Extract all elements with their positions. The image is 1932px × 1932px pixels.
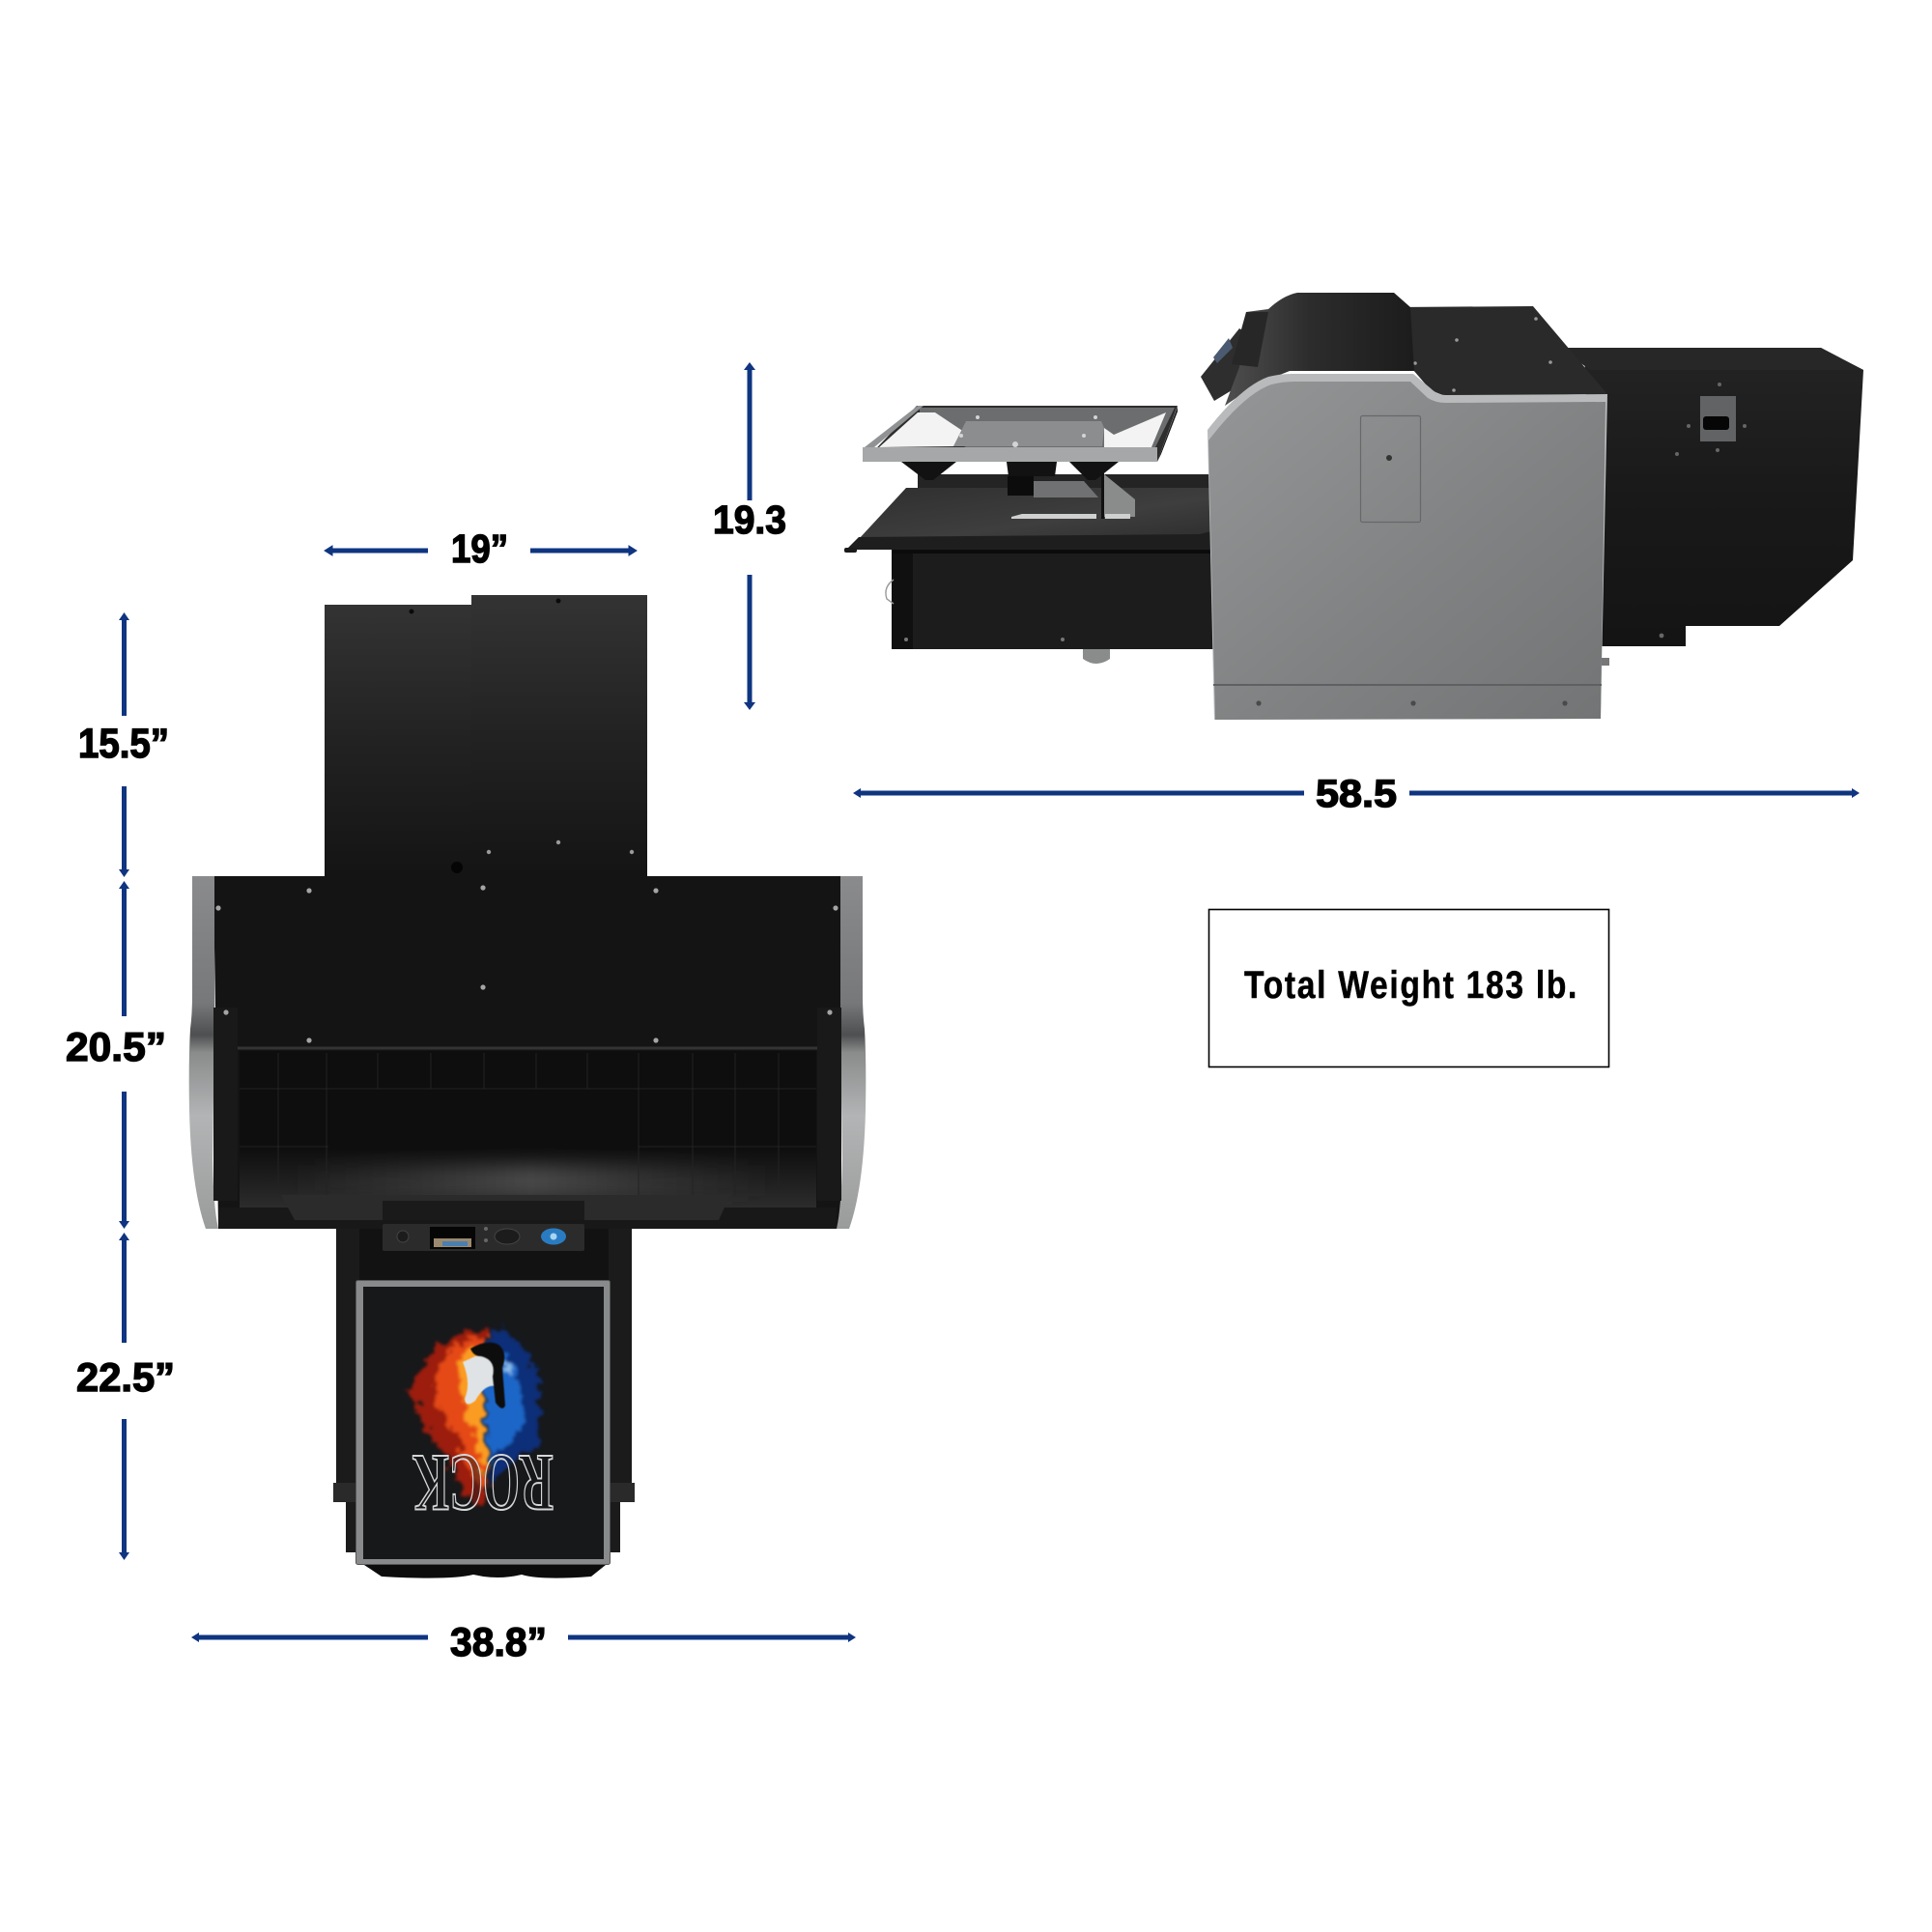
label: 20.5 inch: 20.5”: [66, 1024, 166, 1069]
panel: side-view printer: [844, 293, 1863, 720]
rear unit, right panel: [471, 595, 647, 877]
left control panel: [1201, 328, 1256, 401]
bottom screws: [1256, 700, 1568, 706]
printed artwork: fire half: [412, 1329, 486, 1507]
top panel screws: [1400, 316, 1552, 392]
arrow: 38.8 inch right: [568, 1633, 856, 1642]
right hinge bracket: [817, 1008, 841, 1201]
grey side panel: [1208, 374, 1609, 720]
arrow: 22.5 inch bottom: [119, 1419, 129, 1560]
arrow: 15.5 inch top: [119, 612, 129, 716]
curved cover: [1225, 293, 1414, 406]
blue power button: [541, 1229, 566, 1244]
panel screen: [430, 1227, 475, 1249]
shirt hem below platen: [364, 1565, 606, 1578]
main body: [213, 876, 841, 1229]
platen supports: [901, 462, 1119, 480]
printed artwork: guitar: [463, 1343, 505, 1408]
power connector: [1700, 396, 1736, 441]
printed artwork: rotated ROCK lettering: ROCK: [412, 1437, 554, 1528]
raised platen frame: [863, 406, 1178, 462]
foot: [1083, 649, 1110, 664]
left white opening: [879, 412, 964, 447]
rear nub: [1602, 658, 1609, 666]
platen with shirt: [355, 1281, 611, 1565]
label: 19.3: 19.3: [713, 497, 786, 542]
panel screen: [1213, 338, 1233, 363]
arrow: 58.5 length left: [853, 788, 1304, 798]
callout: total weight: Total Weight 183 lb.: [1244, 963, 1577, 1007]
arrow: 58.5 length right: [1409, 788, 1860, 798]
body screws: [215, 885, 838, 1043]
arrow: 20.5 inch bottom: [119, 1092, 129, 1229]
arrow: 19.3 height bottom: [744, 575, 755, 710]
rear screws: [410, 599, 634, 873]
right grey side trim: [837, 876, 866, 1229]
front band: [218, 1208, 837, 1229]
platen tray base: [333, 1229, 635, 1552]
centre plate: [953, 421, 1104, 446]
arrow: 20.5 inch top: [119, 881, 129, 1016]
base plate: [844, 474, 1214, 554]
arrow: 19 inch width right: [530, 546, 637, 555]
label: 38.8 inch: 38.8”: [450, 1619, 547, 1664]
top panel: [1395, 306, 1607, 396]
label: 22.5 inch: 22.5”: [76, 1354, 175, 1400]
label: 19 inch: 19”: [451, 526, 508, 571]
arrow: 22.5 inch top: [119, 1233, 129, 1343]
rear box: [1560, 348, 1863, 646]
left grey side trim: [189, 876, 218, 1229]
cable: [886, 580, 894, 604]
label: 58.5: 58.5: [1316, 773, 1397, 815]
printed artwork: water half: [486, 1328, 542, 1488]
arrow: 38.8 inch left: [191, 1633, 428, 1642]
label: 15.5 inch: 15.5”: [78, 721, 169, 767]
cover flap: [1232, 312, 1268, 367]
platen support arm: [1008, 473, 1135, 519]
panel: top-view printer: [189, 595, 866, 1578]
left hinge bracket: [213, 1008, 238, 1201]
front handle: [281, 1195, 730, 1220]
right white opening: [1104, 412, 1166, 447]
rear unit, left panel: [325, 605, 471, 877]
transparent cover: [238, 1048, 817, 1208]
arrow: 19.3 height top: [744, 362, 755, 500]
service door: [1360, 415, 1420, 522]
arrow: 15.5 inch bottom: [119, 786, 129, 877]
control panel: [383, 1224, 584, 1251]
drawer unit: [886, 551, 1214, 664]
arrow: 19 inch width left: [325, 546, 428, 555]
callout: total weight: [1209, 910, 1609, 1066]
rear box screws: [1660, 383, 1747, 638]
